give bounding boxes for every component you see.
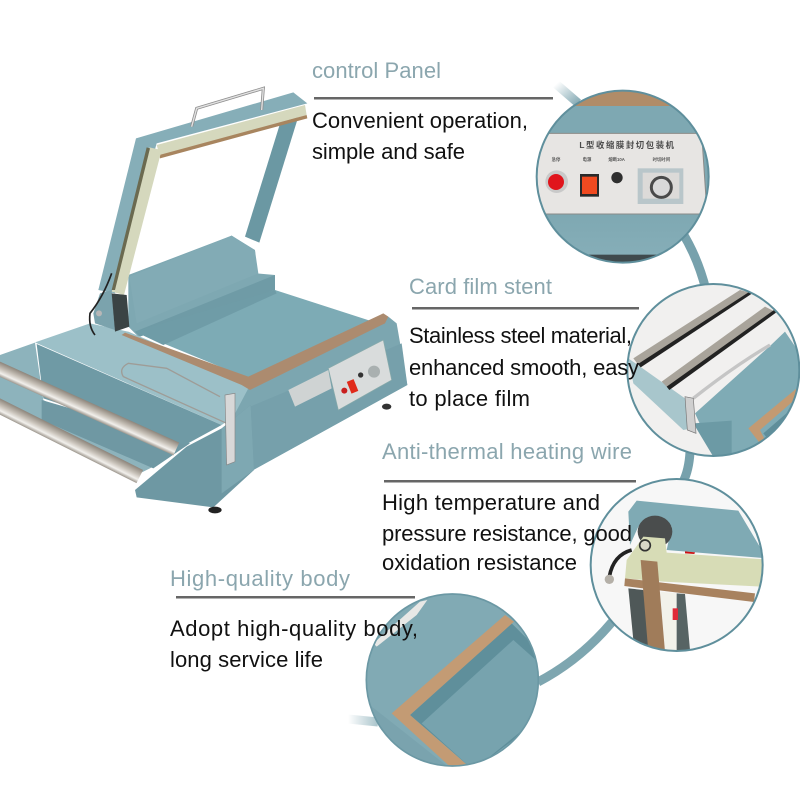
right arm [245, 117, 298, 243]
raised block [128, 236, 275, 337]
callout: body [170, 566, 418, 672]
feet [208, 404, 391, 513]
callout: heating wire: High temperature and [382, 490, 600, 515]
callout: control panel: Convenient operation, [312, 108, 528, 133]
emergency stop button [545, 170, 568, 193]
red part [673, 608, 678, 620]
end plate [135, 405, 254, 507]
tan bars [624, 578, 755, 602]
plate [533, 133, 707, 214]
callout: body: Adopt high-quality body, [170, 616, 418, 641]
tan L-bar [392, 615, 514, 767]
left front face [37, 344, 222, 445]
screw [640, 540, 650, 551]
plate labels [552, 156, 671, 163]
callout: control panel [312, 58, 553, 164]
fuse knob [611, 172, 623, 183]
plate labels: 熔断10A [608, 156, 626, 163]
silver wire [373, 600, 427, 647]
callout: body: High-quality body [170, 566, 350, 591]
wire [693, 345, 770, 398]
cream frame [625, 537, 763, 587]
tan strip [576, 92, 670, 106]
rollers [633, 290, 750, 366]
lower roller [0, 395, 143, 483]
inner tray [410, 623, 540, 770]
teal arm [628, 501, 767, 558]
warning label [288, 370, 332, 407]
tray interior [0, 343, 157, 477]
wire [122, 363, 227, 423]
callout: card film stent: Card film stent [409, 274, 552, 299]
dark uprights [628, 588, 650, 647]
plate title: L型收缩膜封切包装机 [579, 140, 675, 150]
hinge [90, 273, 129, 335]
callout: card film stent: enhanced smooth, easy [409, 355, 639, 380]
silver bracket [225, 393, 235, 465]
top plate [35, 323, 253, 425]
right front face [233, 317, 407, 470]
detail circle: heating wire [587, 477, 767, 657]
plate labels: 急停 [552, 156, 561, 163]
detail circle: body [363, 590, 543, 770]
connector arc between the detail circles [348, 84, 706, 722]
callout: card film stent: to place film [409, 386, 530, 411]
table surface [163, 290, 378, 378]
timer dial [638, 168, 683, 204]
cable [609, 550, 632, 577]
tan sealing L-bar [122, 313, 388, 390]
lower face [363, 700, 450, 770]
callout: heating wire: Anti-thermal heating wire [382, 439, 632, 464]
left arm and top bar [98, 92, 307, 293]
product photo: L-bar sealing machine [0, 88, 407, 513]
callout: card film stent [409, 274, 639, 411]
plate labels: 电源 [583, 156, 592, 163]
power switch [580, 174, 599, 197]
callout: body: long service life [170, 647, 323, 672]
detail circle: control panel [533, 87, 713, 267]
plate labels: 时切时间 [653, 156, 671, 163]
callout: card film stent: Stainless steel material, [409, 323, 632, 348]
callout: control panel: control Panel [312, 58, 441, 83]
tan L-bar [748, 388, 798, 443]
handle [192, 88, 263, 127]
upper roller [0, 359, 179, 455]
callout: control panel: simple and safe [312, 139, 465, 164]
bracket [685, 397, 696, 433]
callout: heating wire [382, 439, 636, 575]
callout: heating wire: oxidation resistance [382, 550, 577, 575]
callout: heating wire: pressure resistance, good [382, 521, 632, 546]
teal body [695, 332, 800, 463]
detail circle: film stent [623, 280, 800, 463]
end face [628, 358, 692, 430]
control plate [328, 340, 392, 410]
